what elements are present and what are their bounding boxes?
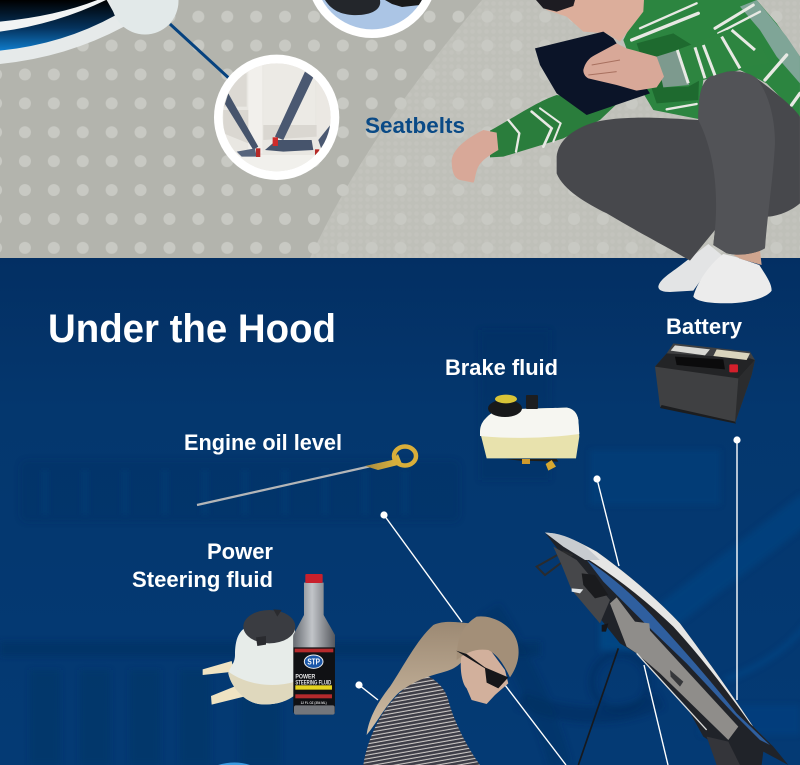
label: power steering fluid: Power [207, 539, 273, 564]
connector line to seatbelts [170, 24, 232, 81]
open car hood [537, 533, 788, 765]
icon: stp power steering bottle [293, 574, 335, 715]
icon: stp power steering bottle: 12 FL OZ (354 ML) [301, 700, 327, 705]
icon: power steering reservoir [203, 609, 295, 705]
icon: stp power steering bottle: STEERING FLUID [295, 680, 331, 687]
icon: seatbelts photo circle [214, 55, 339, 180]
label: power steering fluid [132, 539, 273, 592]
label: power steering fluid: Steering fluid [132, 567, 273, 592]
label: engine oil level: Engine oil level [184, 430, 342, 455]
heading: under the hood: Under the Hood [48, 307, 336, 351]
label: brake fluid: Brake fluid [445, 355, 558, 380]
icon: battery [655, 343, 755, 424]
connector lines and dots [355, 436, 741, 765]
man hand on tablet [583, 43, 664, 91]
woman sunglasses [456, 651, 508, 688]
man left hand [452, 130, 498, 183]
man shoes [658, 244, 722, 292]
grey upper background with dots [0, 0, 800, 258]
man forearm sleeve [657, 30, 770, 87]
woman hair cap [457, 616, 519, 677]
woman ponytail [367, 622, 470, 735]
man crouching with tablet [452, 0, 800, 303]
icon: stp power steering bottle: STP [307, 658, 321, 667]
tablet [535, 32, 650, 115]
man trousers [557, 71, 800, 261]
man sweater body [623, 0, 800, 119]
man ankle [733, 250, 762, 265]
man left arm sleeve [490, 95, 622, 157]
car wheel ring graphic [0, 0, 124, 64]
icon: stp power steering bottle: POWER [295, 674, 315, 681]
man head [537, 0, 644, 42]
man sweater stripes [508, 3, 800, 152]
navy lower background with engine [0, 258, 800, 765]
icon: dipstick [197, 446, 416, 505]
woman face [461, 645, 508, 704]
connector node [112, 0, 178, 34]
label: seatbelts: Seatbelts [365, 113, 465, 138]
icon: brake fluid reservoir [480, 395, 579, 471]
label: battery: Battery [666, 314, 743, 339]
icon: blue fluid cap [218, 762, 250, 765]
woman sweater [363, 676, 480, 765]
woman under the hood [363, 616, 519, 765]
icon: tyre photo circle [312, 0, 432, 38]
